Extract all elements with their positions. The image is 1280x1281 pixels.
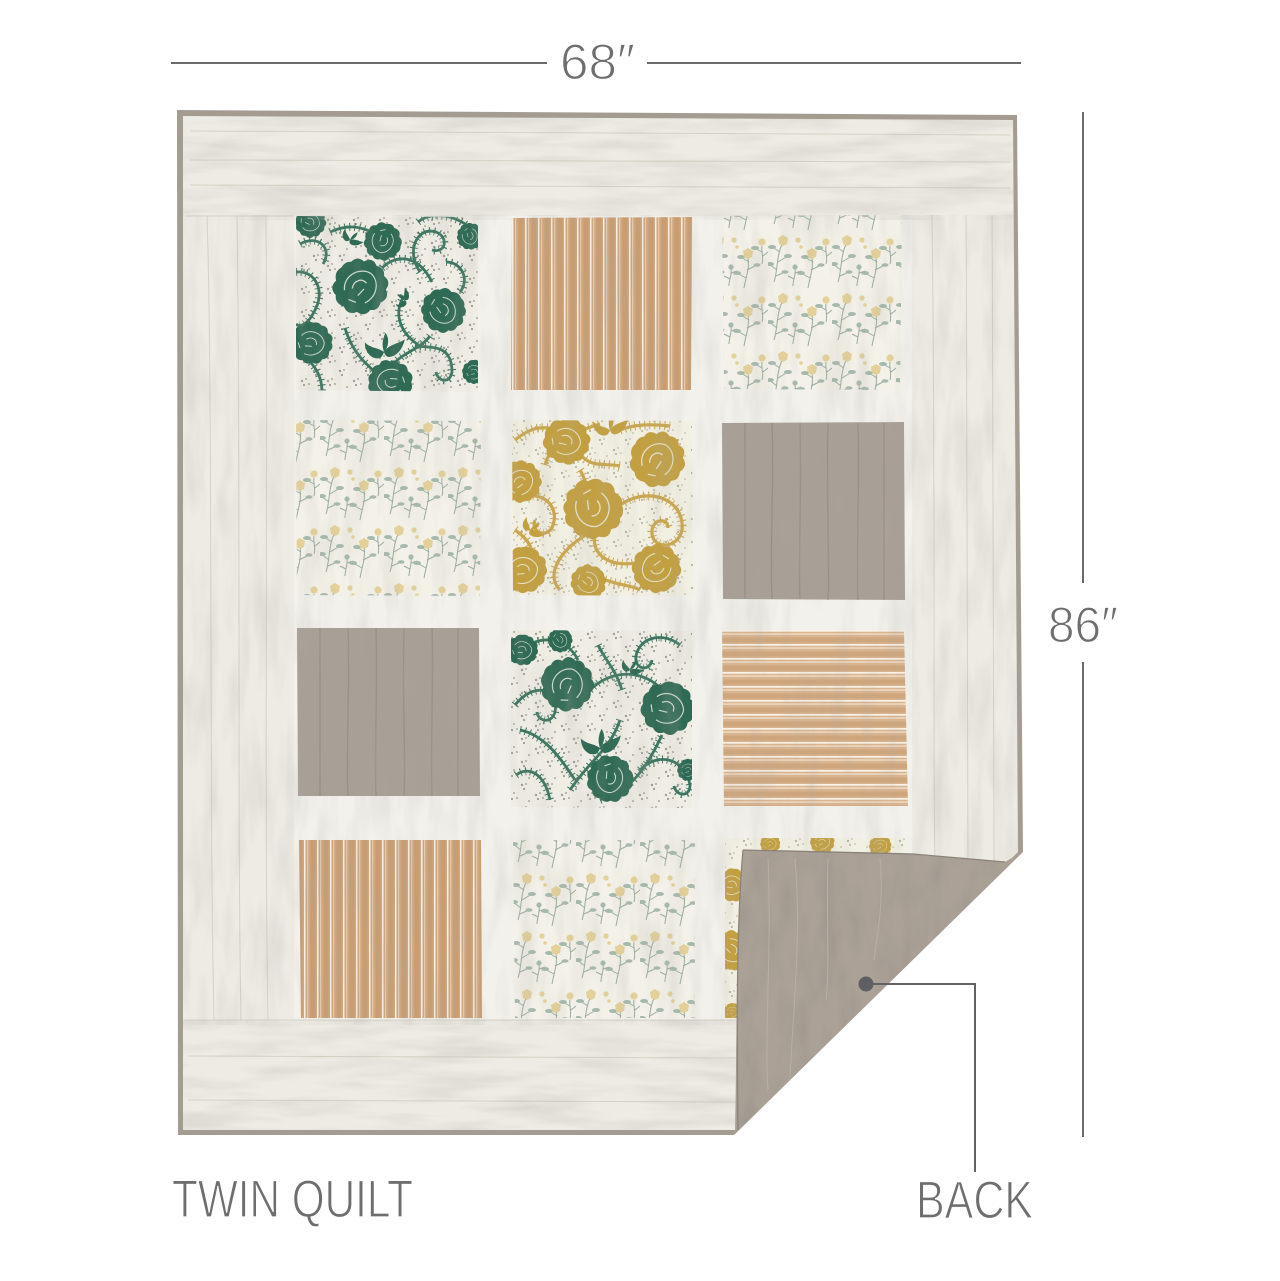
- sashing between the patches: [294, 216, 912, 1020]
- patch: tan vertical stripe 2: [299, 840, 482, 1018]
- patch: tan vertical stripe 1: [511, 217, 692, 390]
- patch: green floral 2: [511, 630, 692, 808]
- quilt: [177, 110, 1025, 1135]
- fabric wrinkles: [177, 110, 1023, 1135]
- patch: small floral 1: [722, 215, 902, 390]
- back callout: [858, 976, 1033, 1230]
- patch: taupe solid 2: [297, 628, 480, 796]
- patch: gold floral 2, mostly hidden by the fold: [725, 838, 905, 1018]
- callout leader: [858, 976, 975, 1172]
- callout label: BACK: [916, 1171, 1033, 1230]
- back flap: [735, 850, 1025, 1135]
- height label: 86″: [1048, 597, 1118, 653]
- patch: green floral 1: [296, 216, 478, 392]
- patch: gold floral 1: [512, 420, 693, 596]
- patch: small floral 2: [296, 420, 481, 596]
- patch: small floral 3: [513, 840, 695, 1018]
- title label: TWIN QUILT: [172, 1170, 413, 1229]
- width label: 68″: [560, 34, 635, 90]
- patch: taupe solid 1: [722, 422, 905, 600]
- patch: tan horizontal stripe: [722, 630, 908, 806]
- quilt front with taupe binding: [177, 110, 1023, 1135]
